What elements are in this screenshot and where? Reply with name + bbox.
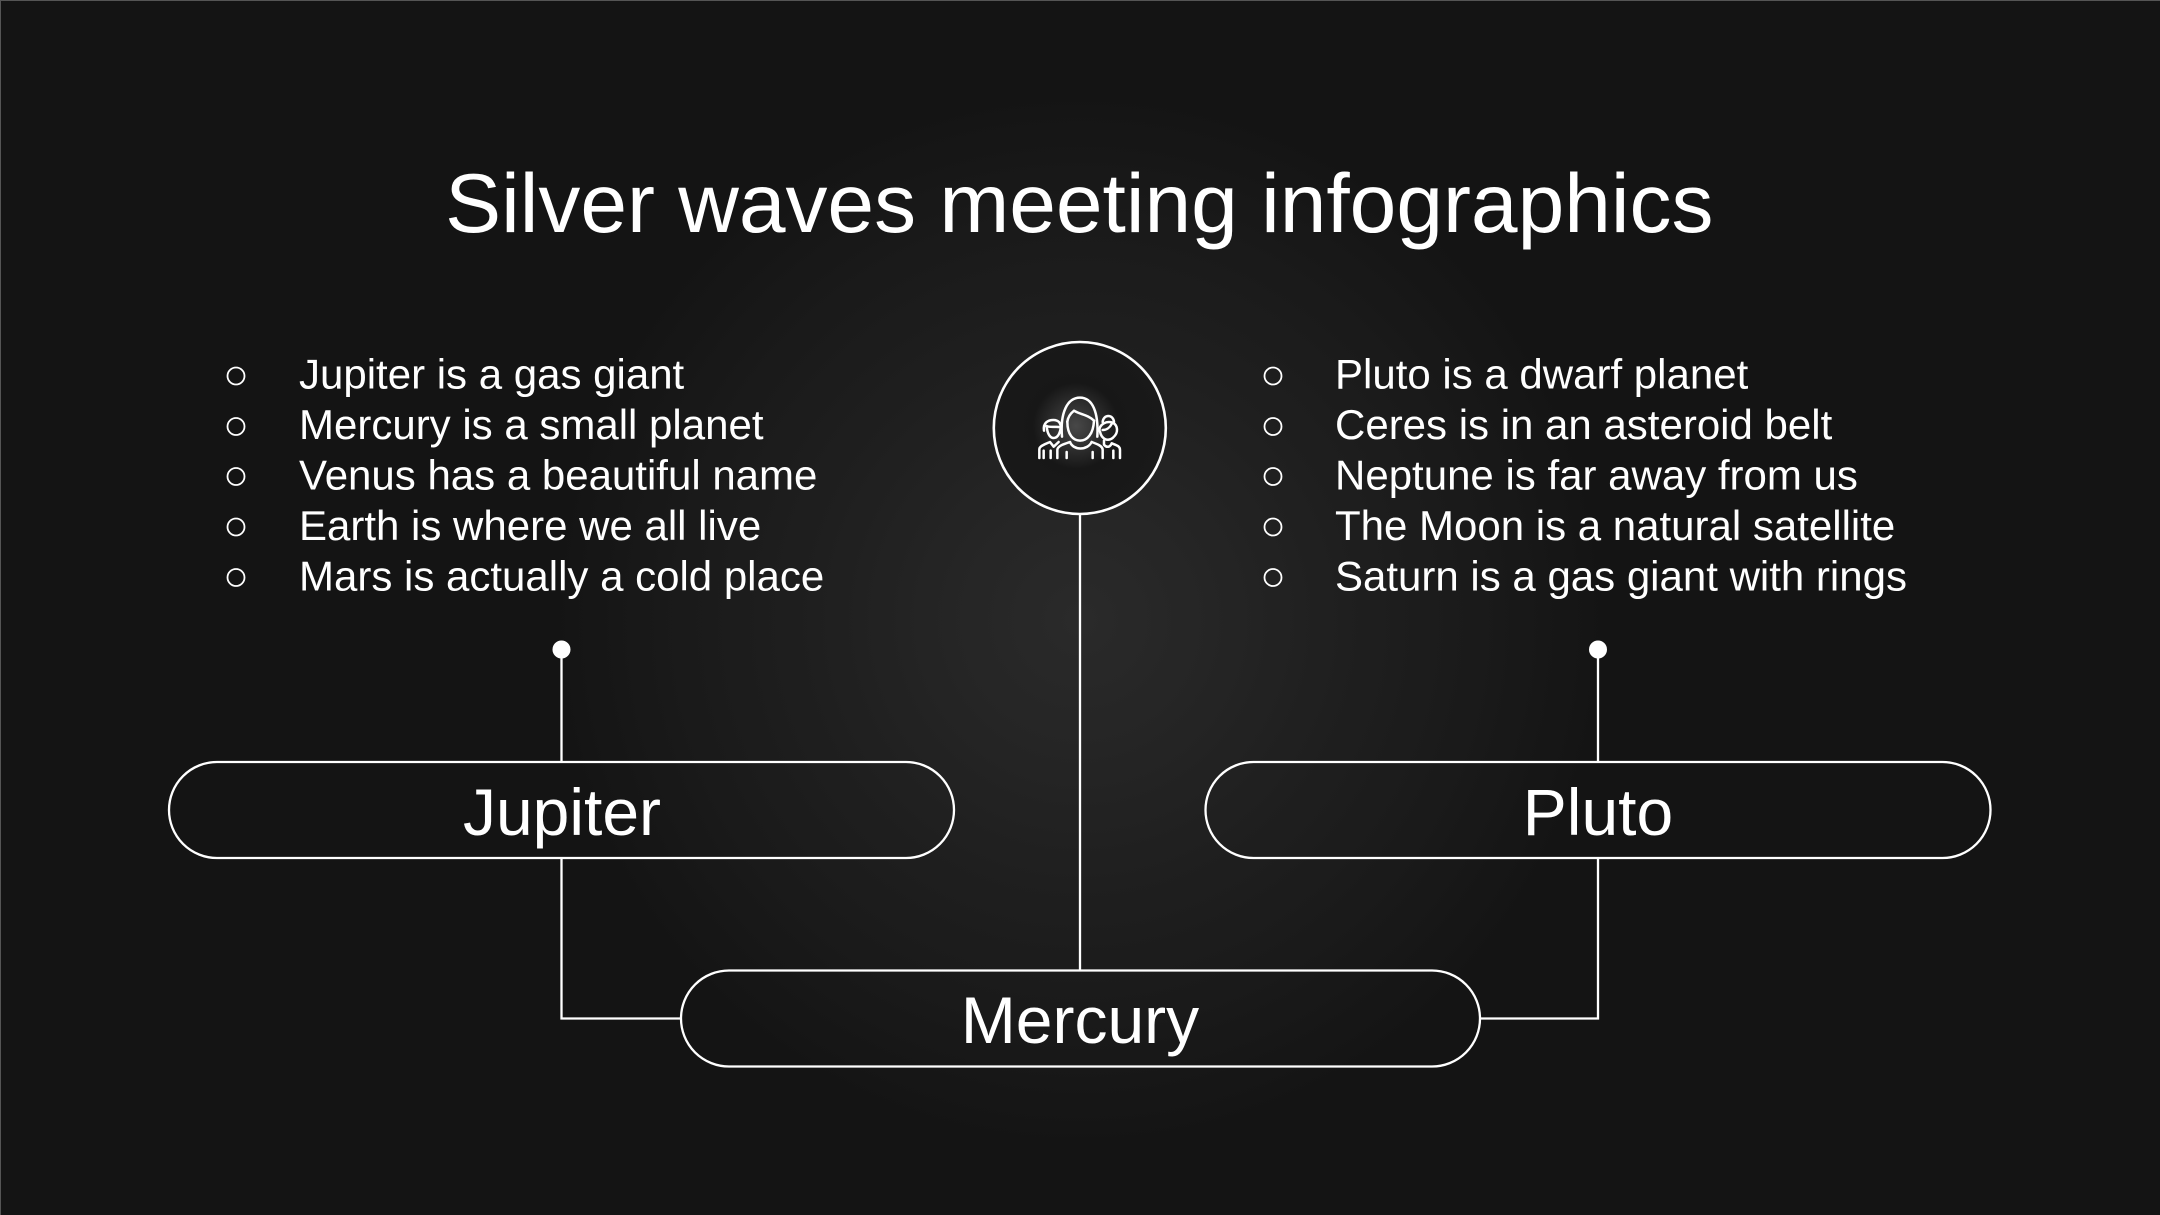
connector: Pluto list dot (1589, 640, 1607, 762)
list: Pluto facts: The Moon is a natural satellite (1335, 502, 1895, 549)
list: Jupiter facts: Mercury is a small planet (299, 401, 764, 448)
connector: Jupiter list dot (552, 640, 570, 762)
connector: Pluto to Mercury (1480, 858, 1598, 1018)
list: Pluto facts: Neptune is far away from us (1335, 452, 1858, 498)
list: Jupiter facts (228, 350, 824, 600)
pill: Pluto: Pluto (1523, 775, 1673, 849)
list: Pluto facts: Pluto is a dwarf planet (1335, 350, 1749, 398)
list: Jupiter facts: Earth is where we all live (299, 502, 761, 549)
pill: Mercury (681, 970, 1480, 1066)
list: Jupiter facts: Jupiter is a gas giant (299, 350, 685, 398)
list: Jupiter facts: Mars is actually a cold place (299, 552, 824, 600)
connector: Jupiter to Mercury (562, 858, 681, 1018)
pill: Jupiter: Jupiter (463, 775, 661, 849)
list: Pluto facts: Ceres is in an asteroid belt (1335, 401, 1833, 448)
connector: icon to Mercury (1079, 513, 1081, 970)
pill: Jupiter (169, 762, 954, 858)
pill: Mercury: Mercury (961, 983, 1199, 1057)
list: Pluto facts (1264, 350, 1907, 600)
list: Jupiter facts: Venus has a beautiful name (299, 452, 817, 498)
icon badge: meeting people (994, 342, 1166, 514)
title: Silver waves meeting infographics (445, 156, 1713, 250)
pill: Pluto (1206, 762, 1990, 858)
icon: three people (1039, 398, 1120, 458)
list: Pluto facts: Saturn is a gas giant with rings (1335, 552, 1907, 600)
